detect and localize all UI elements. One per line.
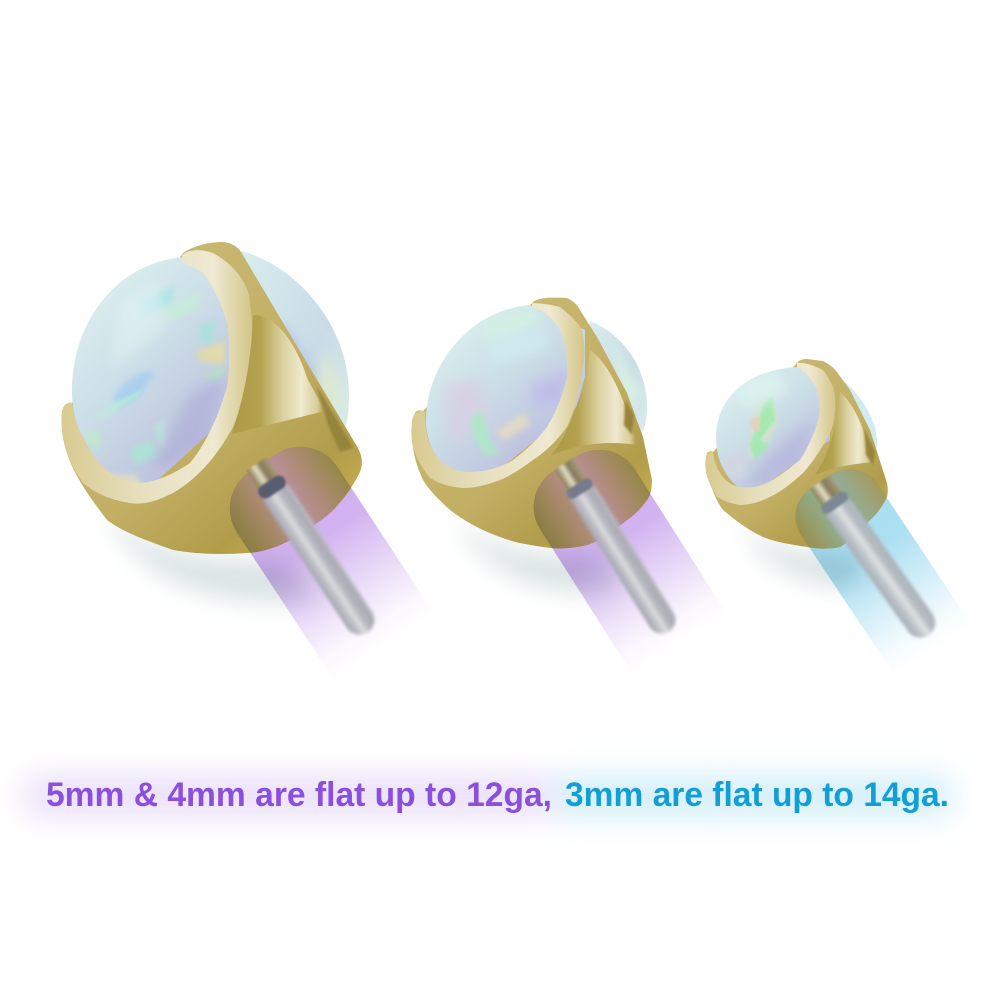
back opal 3mm xyxy=(845,382,877,456)
overlay tint on gold 5mm xyxy=(230,447,351,553)
bezel crescent 4mm xyxy=(411,303,584,488)
overlay tint on gold 3mm xyxy=(796,469,887,549)
back opal 5mm xyxy=(240,251,349,440)
caption glow: blue xyxy=(555,776,950,816)
flat-disc band 4mm xyxy=(518,434,754,717)
gold setting 4mm xyxy=(412,298,652,548)
dark reflection 4mm xyxy=(624,400,634,435)
dome facet 3mm xyxy=(815,392,873,475)
cast shadow 4mm xyxy=(455,520,620,592)
bezel crescent 3mm xyxy=(705,363,835,505)
cast shadow 3mm xyxy=(740,525,865,586)
flat-disc band 3mm xyxy=(783,456,997,714)
4mm opal end xyxy=(411,298,714,654)
threaded pin 5mm xyxy=(244,455,380,641)
back opal 4mm xyxy=(585,321,647,436)
bezel crescent 5mm xyxy=(62,250,252,504)
dome facet 4mm xyxy=(552,350,637,455)
gold setting 5mm xyxy=(62,242,362,554)
dark reflection 3mm xyxy=(864,428,875,465)
3mm opal end xyxy=(705,359,960,660)
front opal 4mm xyxy=(426,305,585,485)
flat-disc band 5mm xyxy=(213,430,463,723)
gold setting 3mm xyxy=(706,359,888,549)
dome facet 5mm xyxy=(232,315,325,434)
dark reflection 5mm xyxy=(316,385,353,452)
front opal 3mm xyxy=(716,367,830,495)
caption glow: purple xyxy=(25,776,555,816)
threaded pin 4mm xyxy=(552,456,681,639)
caption: 3mm: 3mm are flat up to 14ga. xyxy=(565,776,949,814)
overlay tint on gold 4mm xyxy=(534,450,650,548)
5mm opal end xyxy=(62,242,463,723)
front opal 5mm xyxy=(72,257,245,492)
cast shadow 5mm xyxy=(105,510,320,602)
threaded pin 3mm xyxy=(808,473,941,644)
caption xyxy=(46,776,949,814)
caption: 5mm and 4mm: 5mm & 4mm are flat up to 12ga, xyxy=(46,776,552,814)
